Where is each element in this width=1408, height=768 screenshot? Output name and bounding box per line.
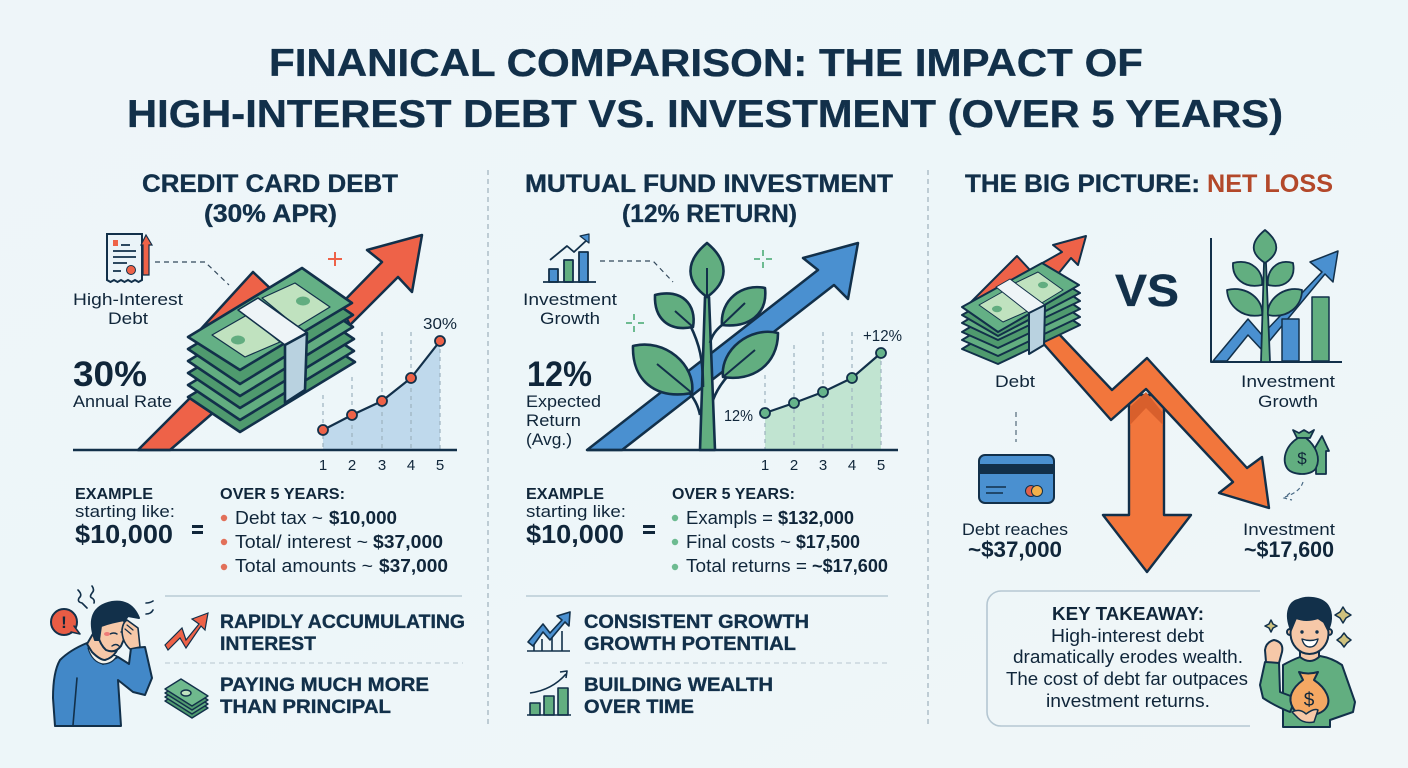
icon: plant <box>633 243 778 450</box>
example block: debt: $37,000 <box>379 556 448 576</box>
chart: investment growth: 5 <box>877 457 885 474</box>
example block: investment: $10,000 <box>526 519 624 549</box>
callout: key takeaway: High-interest debt <box>1051 626 1204 646</box>
panel: mutual fund investment <box>523 170 902 718</box>
example block: debt: Total/ interest ~ <box>235 532 368 552</box>
chart: debt growth: 3 <box>378 457 386 474</box>
icon: plus <box>328 252 342 266</box>
callout: building wealth <box>584 674 773 718</box>
label: debt reaches: ~$37,000 <box>968 537 1062 562</box>
orange zigzag arrow <box>1042 333 1269 508</box>
icon: debt document <box>107 234 152 282</box>
label: investment growth <box>523 290 617 328</box>
callout: paying much more than principal: PAYING MUCH MORE <box>220 674 429 696</box>
stat: 12% expected return: 12% <box>527 355 592 394</box>
icon: money stack <box>188 268 355 432</box>
callout: rapidly accumulating interest: INTEREST <box>220 633 316 655</box>
callout: rapidly accumulating interest: RAPIDLY ACCUMULATING <box>220 611 465 633</box>
example block: debt: EXAMPLE <box>75 486 153 503</box>
example block: debt <box>75 486 448 576</box>
callout: key takeaway: dramatically erodes wealth. <box>1013 647 1243 667</box>
title: HIGH-INTEREST DEBT VS. INVESTMENT (OVER 5 YEARS) <box>127 93 1283 136</box>
callout: key takeaway: KEY TAKEAWAY: <box>1052 604 1204 624</box>
heading: credit card debt <box>142 170 398 228</box>
label: high-interest debt <box>73 290 183 328</box>
icon: credit card <box>979 455 1054 503</box>
chart: investment growth: 3 <box>819 457 827 474</box>
heading: the big picture net loss: THE BIG PICTURE: <box>965 170 1200 198</box>
example block: debt: $10,000 <box>329 508 397 528</box>
callout: consistent growth: GROWTH POTENTIAL <box>584 633 796 655</box>
example block: debt: Debt tax ~ <box>235 508 323 528</box>
callout: building wealth: OVER TIME <box>584 696 694 718</box>
label: investment growth: Growth <box>1258 392 1318 411</box>
chart: debt growth: 1 <box>319 457 327 474</box>
label: investment growth: Growth <box>540 309 600 328</box>
icon: happy person with money bag: $ <box>1304 690 1315 711</box>
chart: investment growth <box>587 328 902 474</box>
label: investment growth: Investment <box>523 290 617 309</box>
icon: small money stack <box>165 679 208 718</box>
callout: key takeaway <box>987 591 1260 726</box>
callout: paying much more than principal <box>220 674 429 718</box>
label: high-interest debt: Debt <box>108 309 148 328</box>
icon: bar chart with arrow <box>543 234 596 282</box>
example block: investment: EXAMPLE <box>526 486 604 503</box>
stat: 30% annual rate: 30% <box>73 355 147 394</box>
chart: debt growth: 4 <box>407 457 415 474</box>
chart: debt growth: 5 <box>436 457 444 474</box>
heading: the big picture net loss <box>965 170 1333 198</box>
chart: debt growth: 2 <box>348 457 356 474</box>
heading: the big picture net loss: NET LOSS <box>1207 170 1333 198</box>
example block: debt: $10,000 <box>75 519 173 549</box>
callout: key takeaway: The cost of debt far outpaces <box>1006 669 1248 689</box>
label: debt: Debt <box>995 372 1035 391</box>
example block: investment: starting like: <box>526 502 626 521</box>
small red arrow <box>970 236 1086 320</box>
blue rising arrow <box>587 243 858 450</box>
example block: investment: Final costs ~ <box>686 532 791 552</box>
panel: credit card debt <box>51 170 465 726</box>
callout: consistent growth: CONSISTENT GROWTH <box>584 611 809 633</box>
callout: consistent growth <box>584 611 809 655</box>
heading: mutual fund investment: MUTUAL FUND INVESTMENT <box>525 170 893 198</box>
example block: investment: OVER 5 YEARS: <box>672 486 795 503</box>
callout: paying much more than principal: THAN PRINCIPAL <box>220 696 391 718</box>
icon: money stack debt <box>962 263 1080 364</box>
label: debt reaches <box>962 520 1068 562</box>
VS: VS <box>1115 265 1179 316</box>
callout: rapidly accumulating interest <box>220 611 465 655</box>
icon: stressed person: ! <box>61 613 67 632</box>
label: debt reaches: Debt reaches <box>962 520 1068 539</box>
title <box>127 42 1283 136</box>
callout: key takeaway: investment returns. <box>1046 691 1210 711</box>
red rising arrow <box>138 235 422 450</box>
icon: stressed person <box>51 586 153 726</box>
icon: plant growth chart <box>1211 230 1342 362</box>
example block: debt: OVER 5 YEARS: <box>220 486 345 503</box>
label: investment value: ~$17,600 <box>1244 537 1334 562</box>
example block: investment: Total returns = <box>686 556 807 576</box>
icon: growth arrow with bars <box>527 612 570 651</box>
example block: investment: $17,500 <box>796 532 860 552</box>
chart: investment growth: +12% <box>863 328 902 345</box>
example block: investment: ~$17,600 <box>812 556 888 576</box>
title: FINANICAL COMPARISON: THE IMPACT OF <box>269 42 1143 85</box>
chart: debt growth: 30% <box>423 316 457 333</box>
example block: debt: $37,000 <box>373 532 443 552</box>
chart: investment growth: 4 <box>848 457 856 474</box>
stat: 12% expected return: Return <box>526 411 581 430</box>
heading: mutual fund investment: (12% RETURN) <box>622 200 797 228</box>
stat: 30% annual rate: Annual Rate <box>73 392 172 411</box>
example block: investment <box>526 486 888 576</box>
stat: 12% expected return: Expected <box>526 392 601 411</box>
orange down arrow <box>1103 392 1191 572</box>
label: investment value: Investment <box>1243 520 1335 539</box>
heading: credit card debt: (30% APR) <box>204 200 337 228</box>
example block: investment: Exampls = <box>686 508 773 528</box>
label: investment growth: Investment <box>1241 372 1335 391</box>
stat: 12% expected return: (Avg.) <box>526 430 572 449</box>
label: high-interest debt: High-Interest <box>73 290 183 309</box>
example block: debt: starting like: <box>75 502 175 521</box>
chart: investment growth: 12% <box>724 408 753 425</box>
heading: credit card debt: CREDIT CARD DEBT <box>142 170 398 198</box>
label: investment growth <box>1241 372 1335 411</box>
icon: money bag: $ <box>1297 449 1307 468</box>
label: investment value <box>1243 520 1335 562</box>
stat: 12% expected return <box>526 355 601 449</box>
icon: wealth bars <box>527 671 571 715</box>
example block: investment: $132,000 <box>778 508 854 528</box>
example block: debt: Total amounts ~ <box>235 556 373 576</box>
icon: zigzag up arrow <box>165 613 208 650</box>
icon: happy person with money bag <box>1260 598 1355 727</box>
stat: 30% annual rate <box>73 355 172 411</box>
callout: building wealth: BUILDING WEALTH <box>584 674 773 696</box>
icon: sparkles <box>626 250 772 332</box>
icon: money bag <box>1285 430 1329 474</box>
chart: investment growth: 2 <box>790 457 798 474</box>
heading: mutual fund investment <box>525 170 893 228</box>
chart: debt growth <box>73 316 457 474</box>
chart: investment growth: 1 <box>761 457 769 474</box>
panel: the big picture <box>962 170 1355 727</box>
